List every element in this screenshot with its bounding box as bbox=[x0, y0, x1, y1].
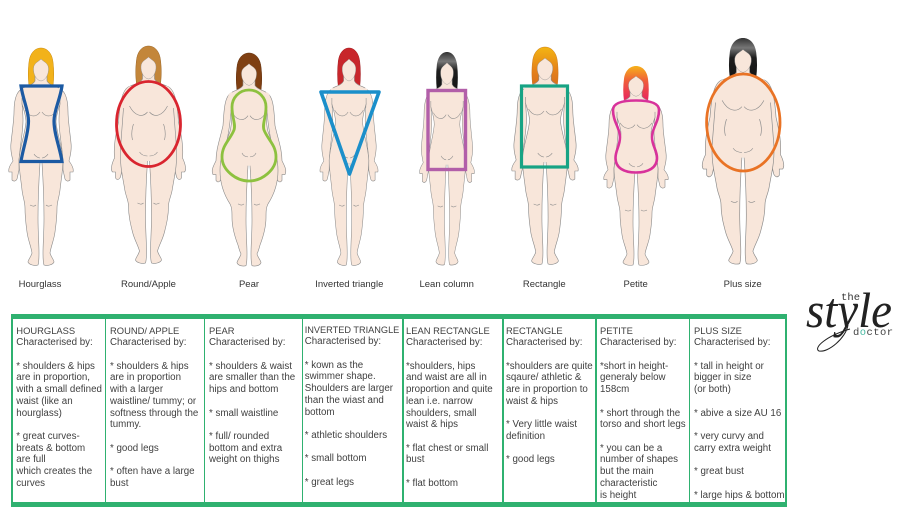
figure label: Petite: Petite bbox=[624, 279, 648, 290]
figure: round apple bbox=[111, 46, 186, 263]
figure label: Hourglass: Hourglass bbox=[19, 279, 61, 290]
column: pear: PEAR Characterised by: * shoulders & waist are smaller than the hips and bottom * small waistline * full/ rounded bottom and extra weight on thighs bbox=[209, 324, 295, 465]
column: petite: PETITE Characterised by: *short in height- generaly below 158cm * short through the torso and short legs * you can be a number of shapes but the main characteristic is height bbox=[600, 324, 686, 501]
table: body shape characteristics bbox=[11, 314, 787, 507]
logo: the style doctor: doctor bbox=[853, 327, 893, 339]
figure label: Inverted triangle: Inverted triangle bbox=[315, 279, 383, 290]
figure: rectangle bbox=[512, 47, 578, 264]
figure: petite bbox=[604, 66, 668, 265]
figure: lean column bbox=[420, 52, 474, 265]
outline: inverted triangle bbox=[321, 92, 379, 174]
figure: plus size bbox=[702, 38, 784, 264]
column: lean rectangle: LEAN RECTANGLE Characterised by: *shoulders, hips and waist are all in proportion and quite lean i.e. narrow shoulders, small waist & hips * flat chest or small bust * flat bottom bbox=[406, 324, 493, 489]
column: round apple: ROUND/ APPLE Characterised by: * shoulders & hips are in proportion with a larger waistline/ tummy; or softness through the tummy. * good legs * often have a large bust bbox=[110, 324, 198, 489]
figure label: Rectangle: Rectangle bbox=[523, 279, 566, 290]
figure: inverted triangle bbox=[320, 48, 378, 265]
figure: pear bbox=[212, 53, 286, 266]
logo: the style doctor: style bbox=[806, 282, 892, 338]
column: rectangle: RECTANGLE Characterised by: *shoulders are quite sqaure/ athletic & are in proportion to waist & hips * Very little waist definition * good legs bbox=[506, 324, 593, 465]
logo: the style doctor: the bbox=[841, 292, 860, 304]
outline: lean column bbox=[428, 90, 466, 170]
figure label: Pear: Pear bbox=[239, 279, 259, 290]
figure label: Lean column: Lean column bbox=[419, 279, 474, 290]
figure label: Plus size: Plus size bbox=[724, 279, 762, 290]
outline: pear bbox=[222, 90, 276, 181]
outline: petite bbox=[613, 100, 659, 172]
column: plus size: PLUS SIZE Characterised by: * tall in height or bigger in size (or both) * abive a size AU 16 * very curvy and carry extra weight * great bust * large hips & bottom bbox=[694, 324, 785, 501]
column: inverted triangle: INVERTED TRIANGLE Characterised by: * kown as the swimmer shape. Shoulders are larger than the wiast and bottom * athletic shoulders * small bottom * great legs bbox=[305, 324, 399, 488]
outline: plus size bbox=[707, 74, 780, 171]
figure label: Round/Apple: Round/Apple bbox=[121, 279, 176, 290]
outline: rectangle bbox=[522, 86, 568, 167]
column: hourglass: HOURGLASS Characterised by: * shoulders & hips are in proportion, with a small defined waist (like an hourglass) * great curves- breats & bottom are full which creates the curves bbox=[16, 324, 102, 489]
figure: hourglass bbox=[9, 48, 73, 265]
outline: hourglass bbox=[21, 86, 62, 162]
outline: round apple bbox=[116, 82, 180, 166]
